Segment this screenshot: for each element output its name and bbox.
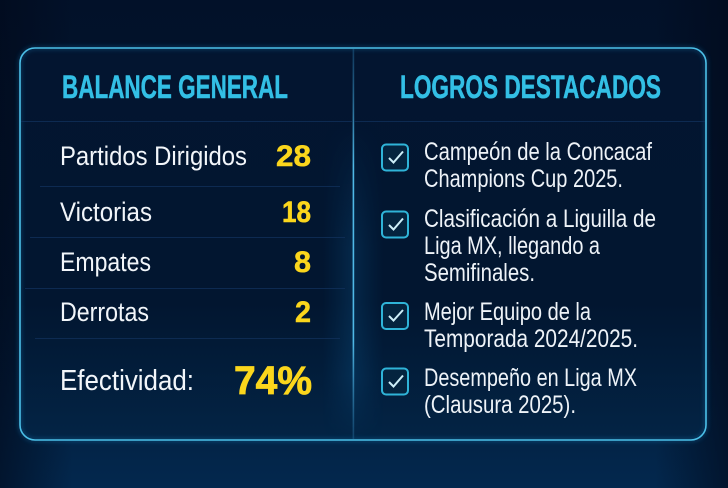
stat: efectividad — [60, 359, 312, 403]
panel: balance general — [21, 69, 352, 403]
icon: checkbox — [382, 212, 408, 238]
stat: partidos dirigidos: 28 — [276, 140, 311, 173]
icon: checkbox — [382, 144, 408, 170]
achievement 2 — [382, 205, 656, 287]
achievement 4: (Clausura 2025). — [424, 391, 576, 419]
stat: empates — [60, 246, 311, 279]
heading: balance general: BALANCE GENERAL — [62, 69, 288, 105]
achievement 4 — [382, 364, 637, 419]
stat: derrotas: 2 — [295, 296, 311, 329]
panel: card frame — [20, 48, 706, 440]
achievement 1: Champions Cup 2025. — [424, 165, 623, 193]
achievement 2: Semifinales. — [424, 259, 535, 287]
stat: derrotas: Derrotas — [60, 297, 149, 327]
column divider — [334, 49, 373, 439]
achievement 1 — [382, 138, 652, 193]
stat: derrotas — [60, 296, 311, 329]
stat: empates: Empates — [60, 247, 151, 277]
stat: empates: 8 — [294, 246, 311, 279]
icon: checkbox — [382, 368, 408, 394]
stat: efectividad: Efectividad: — [60, 365, 194, 397]
achievement 3: Mejor Equipo de la — [424, 298, 591, 326]
stat: victorias: Victorias — [60, 197, 152, 227]
stat: partidos dirigidos: Partidos Dirigidos — [60, 141, 247, 171]
achievement 1: Campeón de la Concacaf — [424, 138, 652, 166]
stat: victorias: 18 — [282, 196, 311, 229]
panel: logros destacados — [354, 69, 705, 419]
achievement 4: Desempeño en Liga MX — [424, 364, 637, 392]
stat rows dividers — [21, 122, 352, 338]
achievement 2: Liga MX, llegando a — [424, 232, 600, 260]
stat: victorias — [60, 196, 311, 229]
stat: efectividad: 74% — [234, 359, 312, 403]
achievement 3 — [382, 298, 638, 353]
achievement 2: Clasificación a Liguilla de — [424, 205, 656, 233]
icon: checkbox — [382, 303, 408, 329]
achievement 3: Temporada 2024/2025. — [424, 325, 638, 353]
